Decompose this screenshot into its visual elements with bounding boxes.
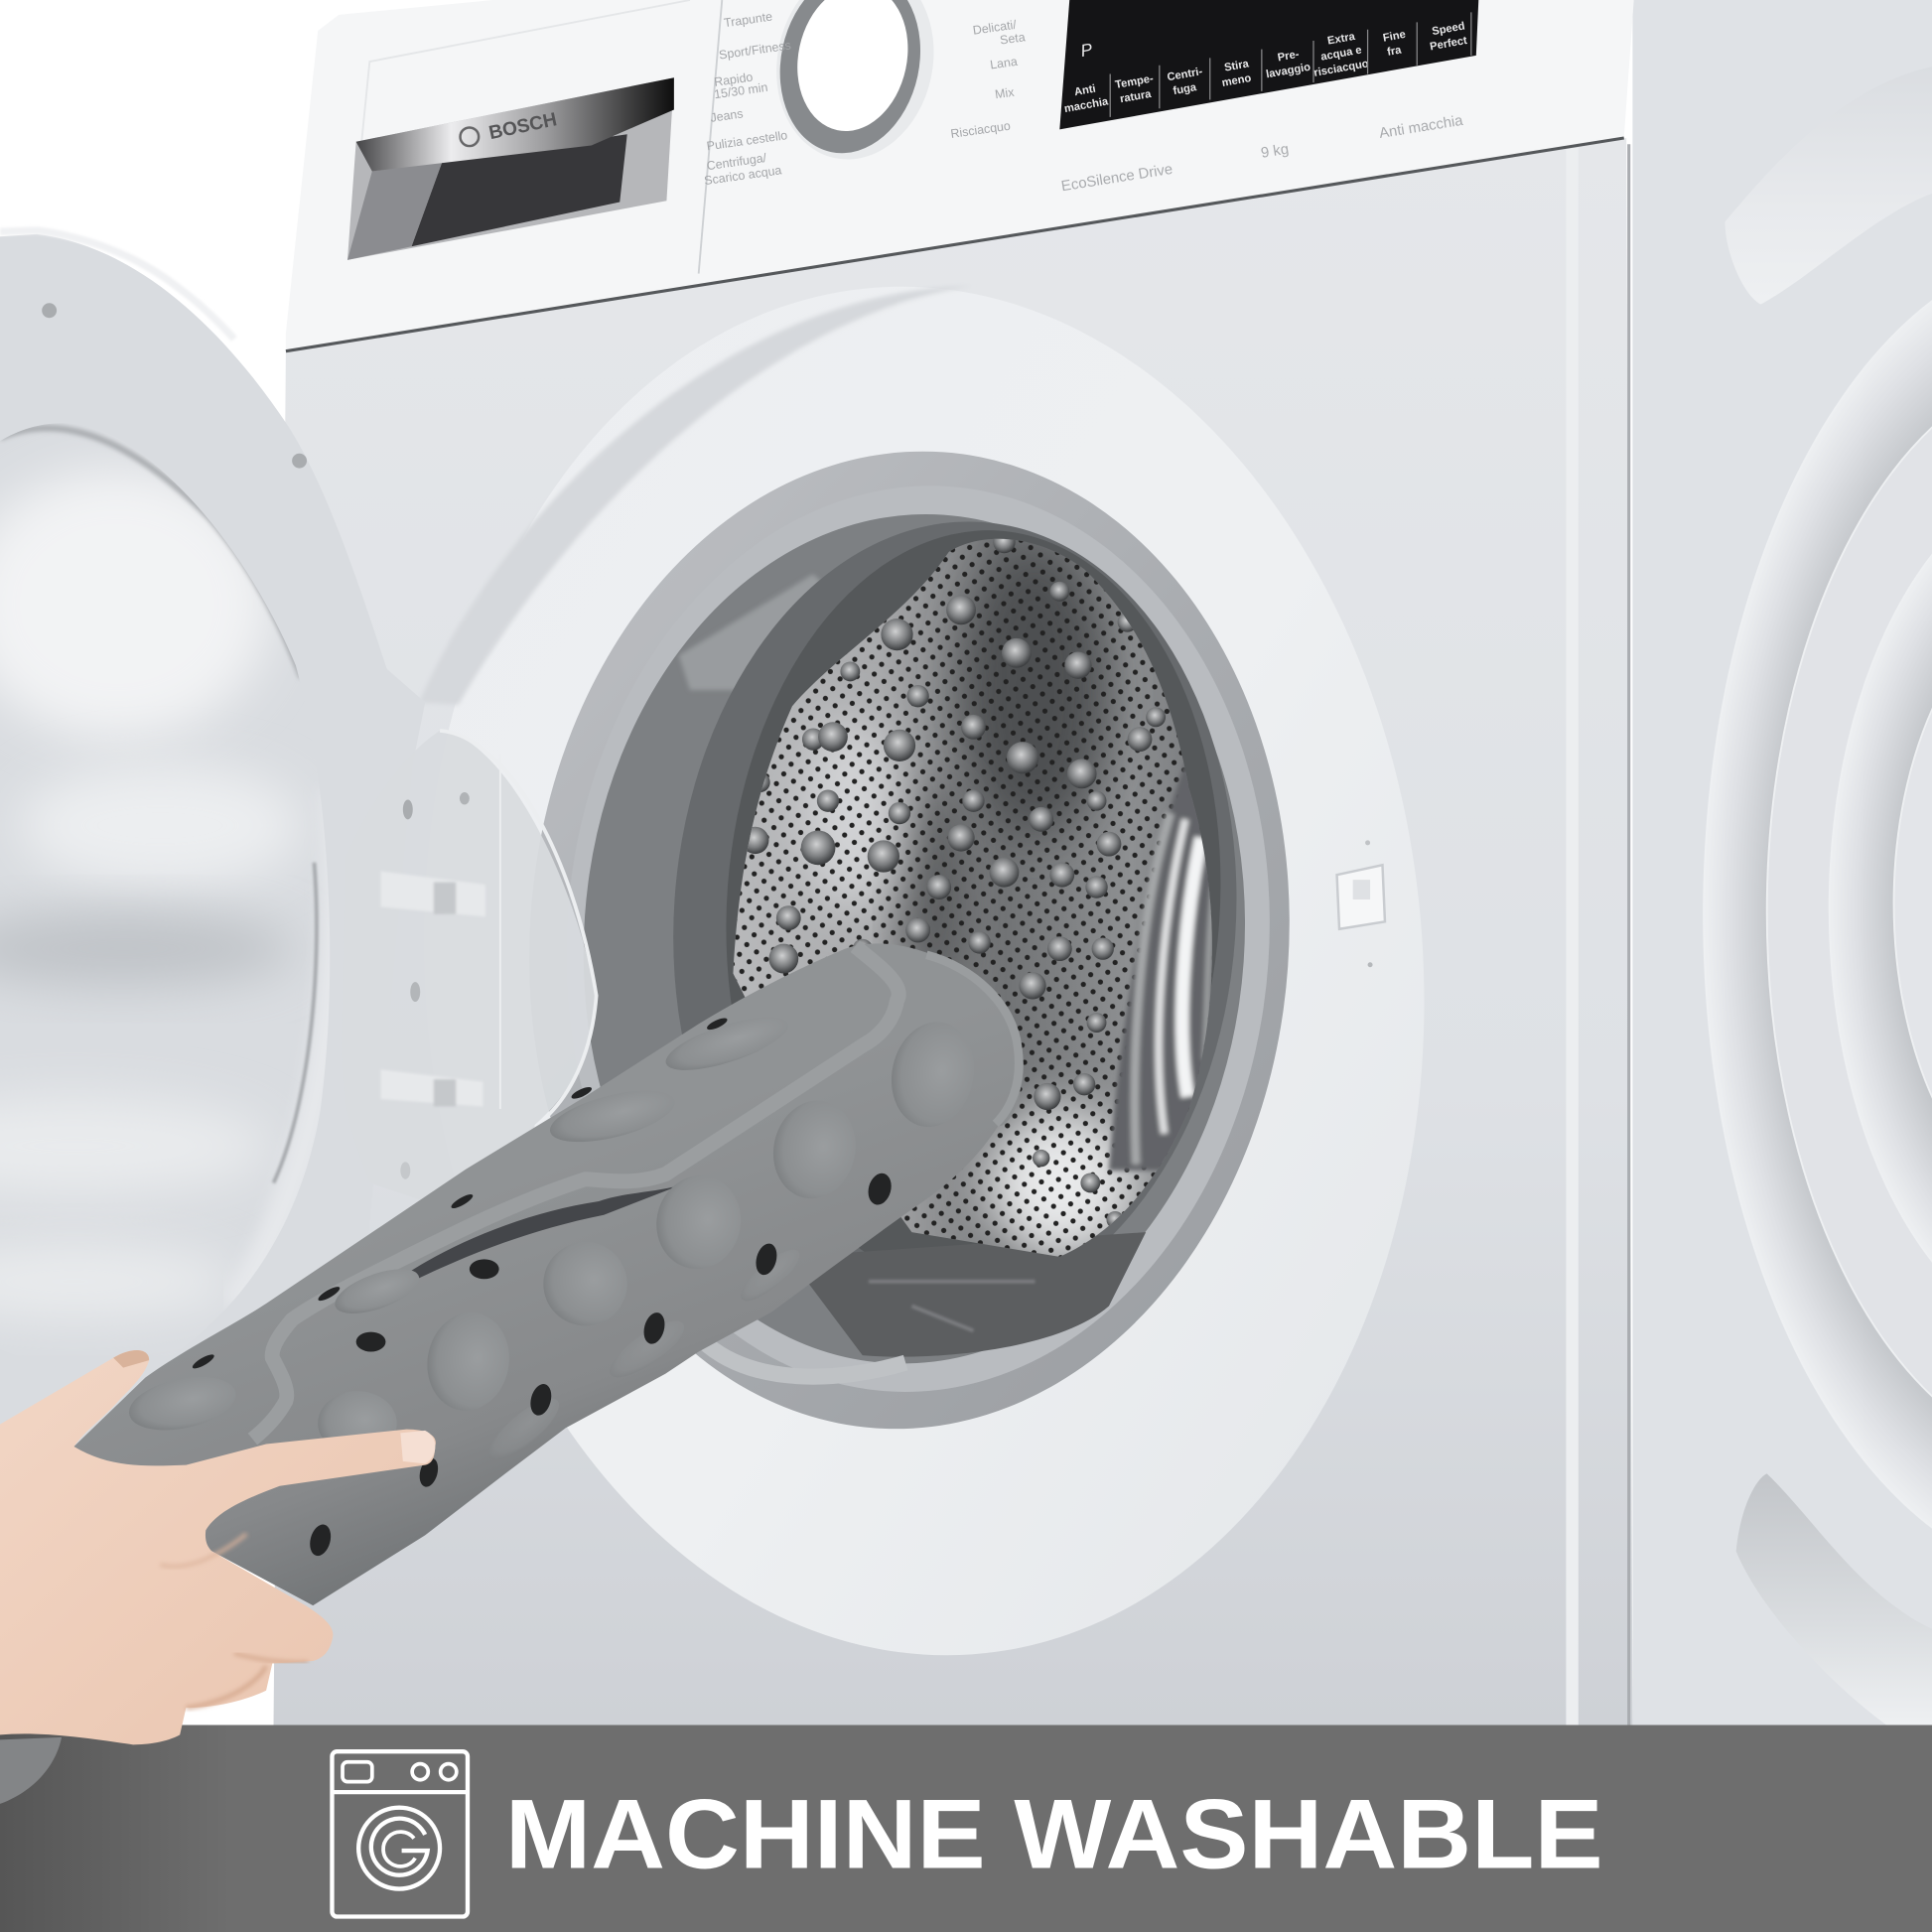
dial labels right: Seta bbox=[999, 30, 1027, 48]
dial labels left: Rapido bbox=[713, 69, 754, 89]
control panel bbox=[286, 0, 1634, 351]
display panel: Speed bbox=[1431, 20, 1466, 38]
door latch slot bbox=[1337, 840, 1385, 967]
mat overlapping flap lip bbox=[252, 946, 898, 1440]
display panel: Perfect bbox=[1429, 35, 1468, 53]
display panel: macchia bbox=[1063, 95, 1110, 115]
display panel: fuga bbox=[1173, 81, 1198, 97]
panel feature labels: 9 kg bbox=[1260, 142, 1290, 162]
programme dial bbox=[759, 0, 951, 174]
door window panel with hooks bbox=[342, 731, 597, 1232]
display panel: meno bbox=[1221, 72, 1252, 89]
neighbouring machine on the right bbox=[1632, 0, 1932, 1725]
washing machine body bbox=[274, 138, 1632, 1725]
banner heading: MACHINE WASHABLE bbox=[505, 1779, 1603, 1889]
detergent drawer bbox=[347, 77, 674, 260]
display panel: Centri- bbox=[1167, 66, 1203, 83]
dial labels left: Sport/Fitness bbox=[718, 39, 792, 63]
dial labels left: Pulizia cestello bbox=[706, 128, 788, 153]
dial labels right: Risciacquo bbox=[950, 119, 1012, 141]
mat bumps bbox=[124, 1007, 984, 1469]
dial labels left: Jeans bbox=[710, 106, 744, 125]
door glass bbox=[0, 423, 330, 1317]
mat corner over banner bbox=[0, 1737, 62, 1804]
display panel: Extra bbox=[1326, 31, 1357, 48]
open door ring bbox=[0, 230, 425, 1453]
display panel: Stira bbox=[1223, 58, 1251, 74]
dial labels right bbox=[950, 18, 1027, 141]
panel feature labels bbox=[1060, 113, 1464, 195]
display panel: lavaggio bbox=[1265, 62, 1311, 80]
dial labels left: Scarico acqua bbox=[703, 163, 782, 188]
brand label: BOSCH bbox=[487, 109, 559, 144]
display panel: Pre- bbox=[1277, 49, 1301, 64]
drum interior bbox=[647, 502, 1263, 1377]
display panel: fra bbox=[1386, 44, 1403, 59]
rubber gasket bbox=[496, 426, 1322, 1454]
display panel: Tempe- bbox=[1114, 72, 1155, 91]
dial labels left bbox=[703, 10, 792, 188]
display panel: risciacquo bbox=[1312, 58, 1370, 79]
dial labels left: Trapunte bbox=[723, 10, 773, 30]
dial labels right: Lana bbox=[989, 55, 1019, 71]
dial labels left: Centrifuga/ bbox=[706, 151, 767, 173]
display panel: ratura bbox=[1119, 88, 1153, 105]
mat drain holes bbox=[191, 1016, 895, 1558]
dial labels right: Mix bbox=[994, 85, 1016, 101]
bottom banner bbox=[0, 1725, 1932, 1932]
panel feature labels: Anti macchia bbox=[1378, 113, 1464, 142]
drum inner ribs bbox=[1109, 752, 1221, 1171]
display panel bbox=[1059, 0, 1478, 129]
dial labels left: 15/30 min bbox=[713, 80, 768, 101]
dial labels right: Delicati/ bbox=[972, 18, 1018, 38]
display panel: P bbox=[1079, 39, 1094, 61]
display panel: acqua e bbox=[1319, 45, 1363, 64]
icon: washing machine bbox=[332, 1751, 468, 1916]
mat end cap bbox=[926, 955, 1019, 1124]
display panel: Anti bbox=[1073, 83, 1097, 98]
display panel: Fine bbox=[1382, 29, 1407, 45]
perforated steel drum bbox=[727, 523, 1232, 1276]
hand holding the mat bbox=[0, 1350, 436, 1744]
porthole surround bbox=[378, 253, 1469, 1689]
rolled bath mat bbox=[73, 943, 1024, 1605]
panel feature labels: EcoSilence Drive bbox=[1060, 162, 1173, 195]
